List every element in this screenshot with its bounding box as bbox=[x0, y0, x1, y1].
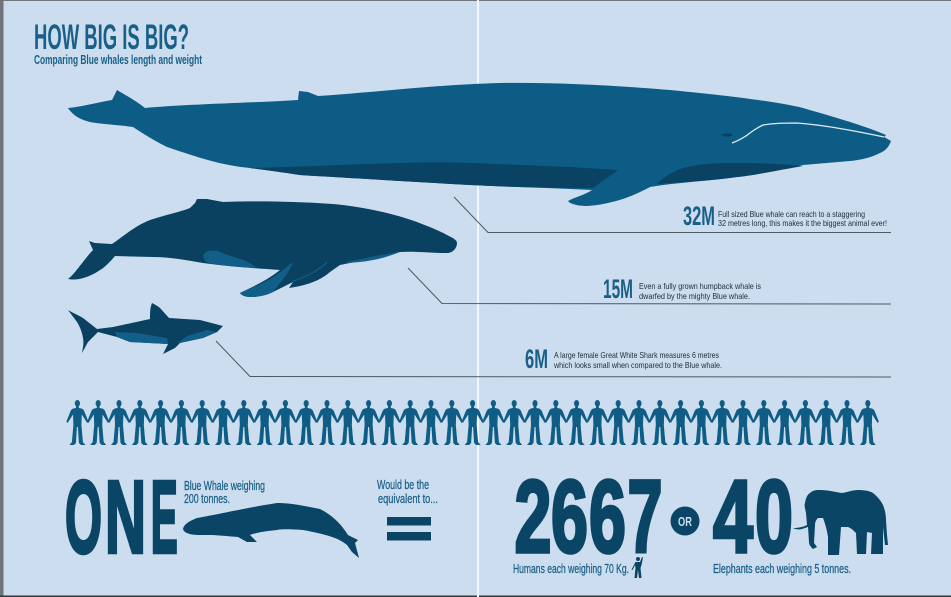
big number: 2667: 7 bbox=[628, 459, 662, 574]
row of people holding hands bbox=[66, 400, 879, 445]
big number: 2667: 6 bbox=[551, 459, 588, 574]
big number: 40: 0 bbox=[755, 459, 793, 574]
caption: elephants: Elephants each weighing 5 tonnes. bbox=[713, 561, 851, 576]
32M label: 32M bbox=[683, 201, 715, 231]
blue whale belly shading bbox=[250, 162, 618, 188]
shark belly bbox=[115, 330, 217, 344]
caption: equivalent: equivalent to... bbox=[378, 491, 438, 506]
icon: small blue whale bbox=[183, 503, 359, 558]
humpback flipper highlight bbox=[240, 262, 293, 297]
leader line: humpback whale bbox=[408, 268, 891, 304]
humpback whale illustration bbox=[68, 199, 457, 297]
caption: blue whale weighing: 200 tonnes. bbox=[184, 491, 230, 506]
blue whale eye bbox=[722, 133, 732, 137]
32M label: Full sized Blue whale can reach to a staggering bbox=[718, 209, 865, 219]
6M label: 6M bbox=[525, 344, 548, 374]
leader line: blue whale bbox=[454, 197, 891, 232]
icon: elephant bbox=[793, 490, 888, 555]
great white shark illustration bbox=[68, 303, 223, 354]
caption: equivalent: Would be the bbox=[377, 477, 429, 492]
blue whale illustration bbox=[68, 83, 891, 206]
15M label: 15M bbox=[603, 274, 633, 304]
6M label: A large female Great White Shark measures 6 metres bbox=[554, 350, 719, 360]
big word: ONE: O bbox=[65, 460, 102, 574]
text: E bbox=[151, 460, 178, 574]
15M label: Even a fully grown humpback whale is bbox=[639, 281, 761, 291]
15M label bbox=[603, 274, 761, 304]
15M label: dwarfed by the mighty Blue whale. bbox=[639, 291, 750, 301]
OR badge bbox=[670, 506, 700, 536]
caption: blue whale weighing: Blue Whale weighing bbox=[184, 478, 265, 493]
OR badge: OR bbox=[678, 514, 692, 529]
leader line: great white shark bbox=[216, 341, 891, 377]
big number: 2667: 6 bbox=[589, 459, 626, 574]
32M label bbox=[683, 201, 887, 231]
title: HOW BIG IS BIG? bbox=[34, 18, 189, 57]
humpback jaw highlight bbox=[347, 252, 400, 263]
big number: 2667 bbox=[514, 459, 662, 574]
icon: human figure bbox=[632, 557, 643, 578]
big number: 2667: 2 bbox=[514, 459, 552, 574]
big number: 40: 4 bbox=[713, 459, 753, 574]
subtitle: Comparing Blue whales length and weight bbox=[34, 53, 203, 67]
caption: blue whale weighing bbox=[184, 478, 265, 506]
blue whale mouth line bbox=[732, 123, 884, 143]
6M label: which looks small when compared to the Blue whale. bbox=[553, 360, 722, 370]
32M label: 32 metres long, this makes it the biggest animal ever! bbox=[718, 218, 887, 228]
caption: humans: Humans each weighing 70 Kg. bbox=[513, 561, 629, 576]
caption: equivalent bbox=[377, 477, 438, 506]
big word: ONE: N bbox=[105, 460, 146, 574]
humpback belly patch bbox=[203, 251, 257, 268]
icon: equals sign bbox=[387, 517, 431, 540]
6M label bbox=[525, 344, 722, 374]
